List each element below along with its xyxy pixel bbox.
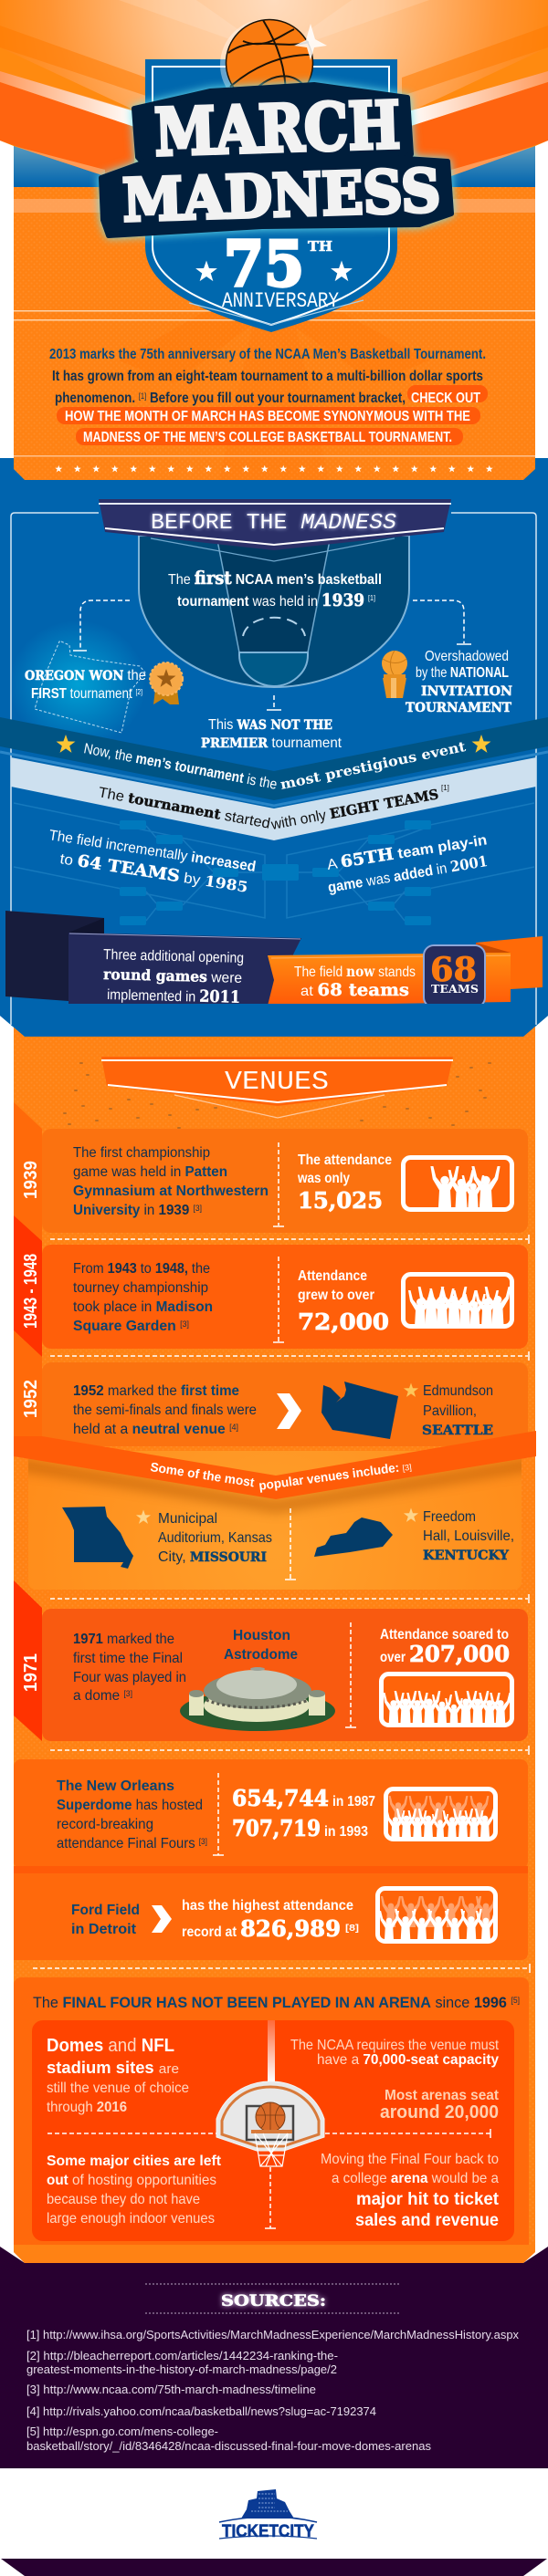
badge: 68 teams: TEAMS [431, 983, 479, 996]
intro text block: MADNESS OF THE MEN’S COLLEGE BASKETBALL TOURNAMENT. [83, 430, 452, 445]
panel: ford field [14, 1873, 528, 1960]
banner: before the madness: BEFORE THE MADNESS [151, 511, 396, 536]
text: missouri venue: Auditorium, Kansas [158, 1530, 272, 1546]
band: started with eight teams [11, 757, 536, 840]
icon: medium crowd [404, 1274, 511, 1327]
text: missouri venue: City, MISSOURI [158, 1549, 267, 1565]
intro text block: HOW THE MONTH OF MARCH HAS BECOME SYNONYMOUS WITH THE [65, 409, 470, 424]
ribbon: field now stands at 68 teams: The field now stands [294, 963, 416, 980]
badge shield [145, 59, 397, 332]
timeline row: 1939: 1939 [21, 1161, 41, 1199]
timeline row: 1971: Astrodome [224, 1647, 298, 1663]
list: sources: [1] http://www.ihsa.org/SportsActivities/MarchMadnessExperience/MarchMadnessHistory.aspx [26, 2328, 519, 2341]
text: kentucky venue: Hall, Louisville, [423, 1528, 514, 1544]
map: oregon outline [35, 641, 145, 733]
timeline row: 1952: [4] [229, 1423, 238, 1432]
text: missouri venue: Municipal [158, 1511, 217, 1527]
icon: basketball [220, 19, 327, 110]
oregon glow [9, 621, 146, 748]
panel: sources background [0, 2247, 548, 2468]
icon: large crowd [382, 1674, 511, 1726]
chart: tournament bracket [14, 803, 534, 925]
badge: 75th anniversary: TH [308, 238, 332, 255]
banner: before the madness [99, 499, 451, 550]
timeline row: 1939 [14, 1102, 528, 1241]
text: domes and nfl: through 2016 [47, 2100, 127, 2115]
header sunburst rays [0, 0, 548, 178]
text: ncaa requirements: have a 70,000-seat capacity [317, 2052, 499, 2068]
divider [50, 1746, 529, 1755]
timeline row: 1952: 1952 marked the first time [73, 1383, 239, 1399]
text: moving final four: sales and revenue [355, 2211, 499, 2230]
panel: ford field: record at [182, 1924, 237, 1940]
timeline row: 1943-1948: 1943 - 1948 [21, 1254, 41, 1329]
timeline row: 1939: game was held in Patten [73, 1164, 227, 1180]
text: national invitation tournament [406, 649, 512, 715]
timeline row: 1939: Gymnasium at Northwestern [73, 1184, 269, 1199]
text: domes and nfl: still the venue of choice [47, 2081, 189, 2096]
text: major cities: large enough indoor venues [47, 2211, 215, 2227]
ribbon: popular venues [14, 1431, 536, 1499]
timeline row: 1943-1948: From 1943 to 1948, the [73, 1261, 210, 1277]
panel: new orleans superdome: attendance Final Fours [57, 1836, 206, 1851]
text: increased to 64 teams [47, 828, 257, 897]
panel: ford field: 826,989 [240, 1915, 341, 1942]
list: sources: greatest-moments-in-the-history-of-march-madness/page/2 [26, 2362, 337, 2376]
panel: new orleans superdome [14, 1759, 528, 1873]
text: domes and nfl: Domes and NFL [47, 2036, 174, 2056]
connector: left dashed [73, 600, 130, 651]
text: moving final four: Moving the Final Four back to [321, 2152, 499, 2167]
redraw venues bottom edge [14, 2245, 535, 2263]
timeline row: 1943-1948: Attendance [298, 1268, 367, 1284]
timeline row: 1939: was only [297, 1171, 350, 1186]
text: seattle venue: Edmundson [423, 1383, 493, 1399]
panel: new orleans superdome: The New Orleans [57, 1778, 174, 1794]
text: first tournament: tournament was held in 1939 [177, 590, 370, 610]
text: 65th team play-in: A 65TH team play-in [325, 830, 489, 874]
white line of blue panel sides [11, 1004, 536, 1025]
ribbon: field now stands at 68 teams: at 68 teams [300, 980, 409, 1000]
text: increased to 64 teams: The field incrementally increased [47, 828, 257, 875]
timeline row: 1971: 1971 [21, 1653, 41, 1692]
row of stars [49, 464, 499, 475]
text: 65th team play-in [325, 830, 489, 896]
timeline row: 1952: 1952 [21, 1380, 41, 1418]
timeline row: 1952 [14, 1330, 528, 1446]
badge: 68 teams: 68 [430, 951, 477, 989]
intro text block: [1] [139, 391, 146, 401]
text: ncaa requirements: The NCAA requires the venue must [290, 2038, 499, 2053]
text: kentucky venue [404, 1507, 514, 1563]
logo: TicketCity: TICKETCITY [222, 2522, 314, 2541]
text: was not the premier: This WAS NOT THE [208, 717, 332, 733]
band: most prestigious event: Now, the men’s tournament is the [82, 741, 279, 793]
panel: new orleans superdome: in 1987 [332, 1794, 375, 1809]
icon: superdome crowd [385, 1789, 495, 1840]
timeline row: 1943-1948: 72,000 [298, 1309, 389, 1335]
list: sources: [3] http://www.ncaa.com/75th-march-madness/timeline [26, 2383, 316, 2396]
divider [33, 1964, 530, 1973]
panel: final four arena: [5] [511, 1996, 520, 2005]
panel outline: before the madness [11, 513, 536, 1025]
divider [50, 1235, 529, 1244]
badge: 75th anniversary [195, 228, 353, 313]
list: sources: [2] http://bleacherreport.com/articles/1442234-ranking-the- [26, 2349, 338, 2362]
badge: 68 teams [424, 945, 485, 1007]
text: ncaa requirements: Most arenas seat [385, 2088, 500, 2103]
text: increased to 64 teams: to 64 TEAMS by 1985 [58, 849, 249, 897]
panel: new orleans superdome: [3] [199, 1837, 207, 1846]
ribbon: field now stands at 68 teams [268, 936, 543, 1006]
connector: centre dashed [267, 695, 281, 710]
band: started with eight teams: with only EIGHT TEAMS [269, 786, 440, 833]
text: oregon won [25, 668, 146, 702]
banner: venues [101, 1057, 453, 1118]
text: seattle venue: Pavillion, [423, 1403, 477, 1419]
timeline row: 1971: 207,000 [409, 1641, 510, 1667]
text: national invitation tournament: INVITATION [421, 684, 512, 699]
panel: ford field: Ford Field [71, 1903, 140, 1918]
band: started with eight teams: The tournament started [97, 784, 271, 832]
panel: new orleans superdome: Superdome has hosted [57, 1798, 203, 1813]
text: ncaa requirements [290, 2038, 500, 2122]
heading: sources: SOURCES: [221, 2292, 326, 2310]
panel: venues background [14, 1026, 535, 2263]
text: ncaa requirements: around 20,000 [380, 2102, 499, 2122]
dividers: quadrants [47, 2129, 490, 2228]
badge: 75th anniversary: 75 [224, 228, 304, 301]
text: first tournament: The first NCAA men’s basketball [168, 567, 382, 589]
intro text block: Before you fill out your tournament bracket, [146, 391, 406, 406]
text: moving final four: major hit to ticket [356, 2190, 500, 2209]
timeline row: 1939: University in 1939 [73, 1203, 191, 1218]
connector: right dashed [413, 600, 471, 644]
divider [50, 1351, 529, 1361]
text: major cities [47, 2154, 222, 2227]
timeline row: 1971: first time the Final [73, 1651, 183, 1666]
text: oregon won: [2] [136, 688, 142, 696]
text: first tournament [168, 567, 382, 610]
text: oregon won: FIRST tournament [31, 686, 144, 702]
text: national invitation tournament: Overshadowed [425, 649, 509, 664]
ribbon: opening round games: Three additional opening [103, 947, 244, 966]
text: major cities: out of hosting opportunities [47, 2173, 216, 2188]
timeline row: 1939: The attendance [298, 1152, 392, 1168]
panel: ford field: in Detroit [71, 1922, 137, 1937]
divider: venues [285, 1508, 296, 1580]
panel: ford field: [8] [345, 1924, 359, 1934]
text: domes and nfl: stadium sites are [47, 2059, 179, 2077]
timeline row: 1939: The first championship [73, 1145, 210, 1161]
timeline row: 1943-1948: tourney championship [73, 1280, 208, 1296]
panel: ford field: has the highest attendance [182, 1898, 353, 1914]
icon: small crowd [404, 1157, 511, 1210]
timeline row: 1971: a dome [73, 1688, 121, 1704]
chart: basketball court key [139, 536, 409, 687]
text: kentucky venue: Freedom [423, 1509, 476, 1525]
timeline row: 1943-1948: [3] [180, 1319, 189, 1329]
panel: final four arena: The FINAL FOUR HAS NOT BEEN PLAYED IN AN ARENA since 1996 [33, 1994, 509, 2011]
footer band [1, 2559, 547, 2576]
ribbon: popular venues: Some of the most [150, 1459, 256, 1489]
heading: sources [145, 2284, 399, 2313]
text: first tournament: [1] [368, 594, 375, 602]
icon: backboard, hoop and ball [216, 2020, 324, 2166]
text: national invitation tournament: TOURNAMENT [406, 701, 512, 715]
blue section bottom edge over venues [0, 1004, 548, 1037]
icon: ford field crowd [378, 1889, 496, 1942]
timeline row: 1952: the semi-finals and finals were [73, 1403, 257, 1418]
timeline row: 1971: 1971 marked the [73, 1632, 174, 1647]
text: domes and nfl [47, 2036, 189, 2115]
icon: trophy [382, 651, 407, 698]
map: missouri [62, 1507, 133, 1569]
badge: 75th anniversary: ANNIVERSARY [222, 289, 339, 313]
timeline row: 1943-1948: took place in Madison [73, 1299, 213, 1315]
panel: new orleans superdome: 654,744 [232, 1785, 329, 1811]
panel: intro header orange field [14, 137, 535, 480]
banner: venues: VENUES [225, 1067, 329, 1097]
text: missouri venue [136, 1509, 272, 1565]
icon: medal [150, 662, 183, 704]
text: was not the premier: PREMIER tournament [201, 735, 342, 751]
section: blue before-the-madness background [0, 458, 548, 1037]
list: sources [26, 2328, 519, 2453]
timeline row: 1971: [3] [123, 1689, 132, 1698]
intro text block [49, 347, 488, 445]
intro text block: phenomenon. [55, 391, 151, 406]
timeline row: 1939: 15,025 [298, 1187, 383, 1214]
divider [50, 1594, 529, 1603]
timeline row: 1952: held at a neutral venue [73, 1422, 227, 1437]
text: moving final four [321, 2152, 500, 2230]
text: oregon won: OREGON WON the [25, 668, 146, 683]
list: sources: basketball/story/_/id/8346428/ncaa-discussed-final-four-move-domes-arenas [26, 2439, 431, 2453]
panel: popular venues [14, 1451, 536, 1590]
title: March Madness: MARCH [153, 87, 401, 171]
list: sources: [5] http://espn.go.com/mens-college- [26, 2425, 218, 2438]
timeline row: 1971: Attendance soared to [380, 1627, 509, 1643]
text: moving final four: a college arena would be a [332, 2171, 499, 2186]
logo: TicketCity [219, 2489, 317, 2541]
panel: final four arena [14, 1977, 529, 2254]
timeline row: 1971 [14, 1580, 528, 1741]
ribbon: opening round games: implemented in 2011 [107, 985, 240, 1007]
band: started with eight teams: [1] [441, 784, 449, 792]
timeline row: 1971: Houston [233, 1628, 290, 1643]
text: major cities: Some major cities are left [47, 2154, 222, 2169]
text: major cities: because they do not have [47, 2192, 200, 2207]
ribbon: opening round games [5, 911, 301, 1017]
ribbon: popular venues: popular venues include: [258, 1460, 400, 1493]
timeline row: 1943-1948: Square Garden [73, 1319, 178, 1334]
timeline row: 1943-1948: grew to over [298, 1288, 374, 1303]
panel: new orleans superdome: in 1993 [324, 1824, 368, 1840]
map: washington [321, 1382, 398, 1439]
icon: astrodome [180, 1667, 335, 1731]
ribbon: popular venues: [3] [402, 1463, 412, 1473]
list: sources: [4] http://rivals.yahoo.com/ncaa/basketball/news?slug=ac-7192374 [26, 2404, 376, 2418]
text: seattle venue: SEATTLE [422, 1424, 493, 1438]
title: March Madness [101, 85, 451, 235]
title: March Madness: MADNESS [121, 157, 441, 235]
text: was not the premier [201, 717, 342, 751]
band: most prestigious event [0, 717, 548, 806]
band: most prestigious event: most prestigious event [279, 738, 468, 793]
map: kentucky [314, 1517, 393, 1557]
timeline row: 1971: over [380, 1650, 406, 1665]
panel: new orleans superdome: record-breaking [57, 1817, 153, 1832]
timeline row: 1939: [3] [194, 1204, 202, 1213]
text: 65th team play-in: game was added in 2001 [327, 852, 489, 896]
timeline row: 1971: Four was played in [73, 1670, 186, 1685]
text: kentucky venue: KENTUCKY [423, 1549, 510, 1563]
text: seattle venue [404, 1383, 493, 1438]
intro text block: CHECK OUT [411, 391, 480, 406]
arrow: chevron 1952 [277, 1393, 301, 1429]
text: national invitation tournament: by the NATIONAL [416, 665, 509, 681]
panel: new orleans superdome: 707,719 [232, 1815, 321, 1841]
timeline row: 1943-1948 [14, 1215, 528, 1357]
ribbon: opening round games: round games were [103, 965, 242, 986]
